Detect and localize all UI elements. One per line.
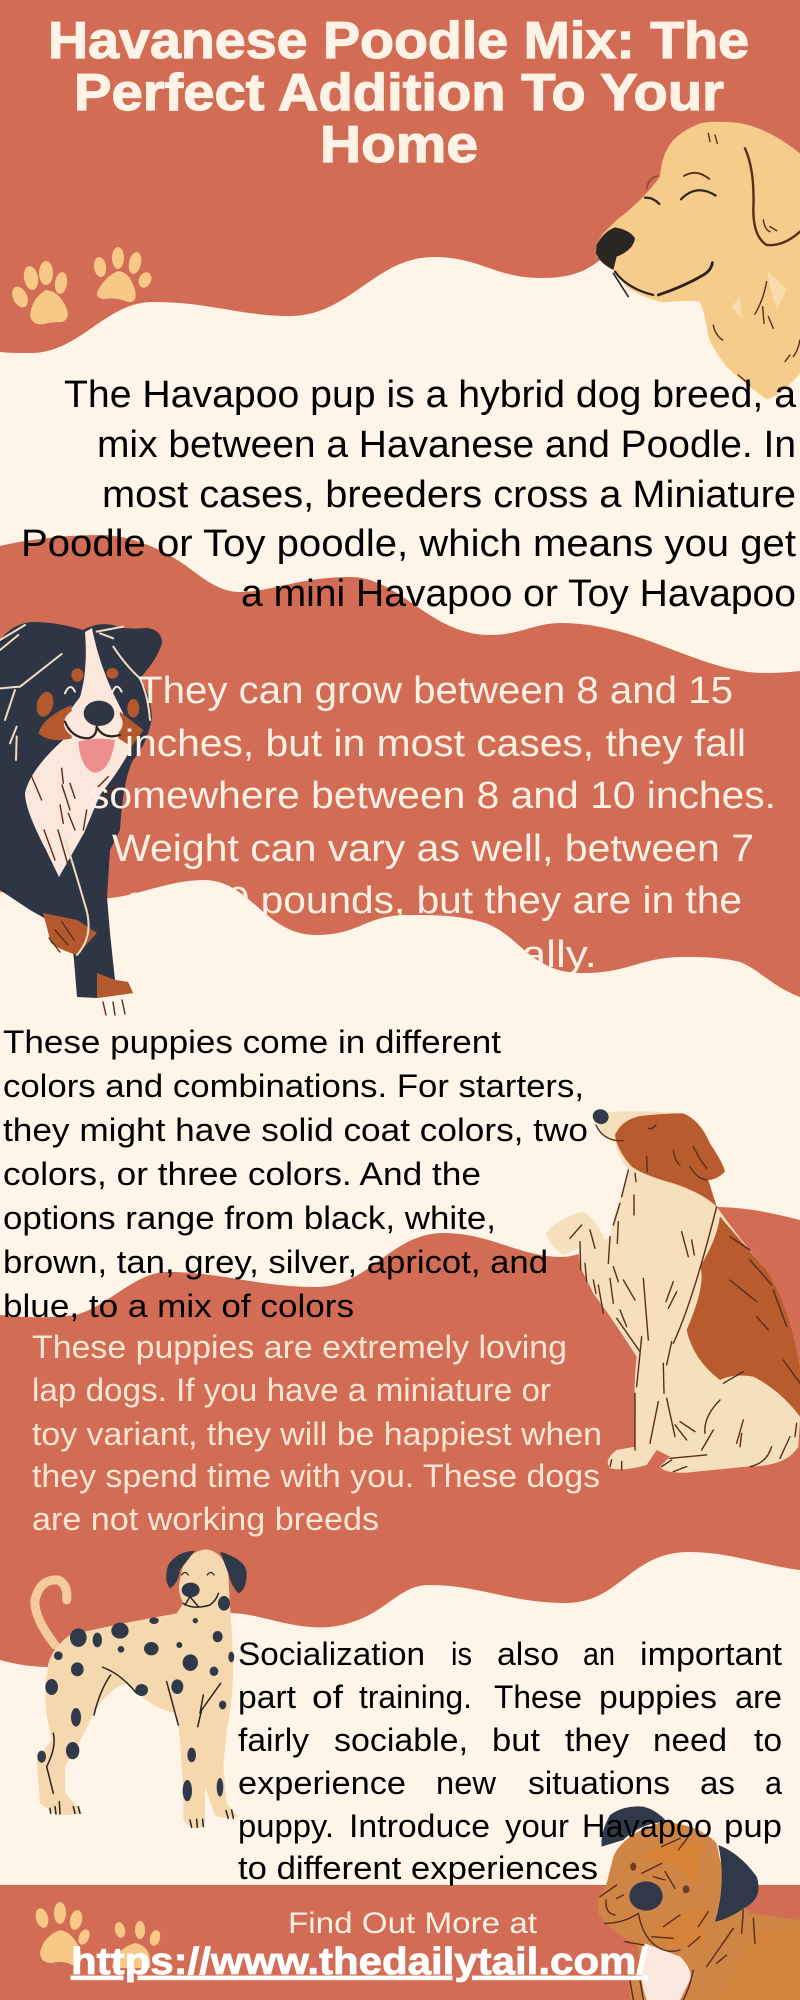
footer label: Find Out More at bbox=[288, 1907, 538, 1940]
text block: socialization: new bbox=[436, 1765, 497, 1801]
text block: coat colours: These puppies come in different bbox=[3, 1024, 501, 1060]
text block: coat colours: options range from black, white, bbox=[3, 1200, 496, 1236]
text block: socialization: important bbox=[640, 1636, 782, 1672]
text block: coat colours: colors and combinations. For starters, bbox=[3, 1068, 584, 1104]
illustration: bernese dog bbox=[0, 622, 162, 1015]
text block: socialization: fairly bbox=[238, 1722, 309, 1758]
text block: socialization: Socialization bbox=[238, 1636, 425, 1672]
text block: socialization: a bbox=[765, 1765, 782, 1801]
illustration: dalmatian dog bbox=[35, 1549, 247, 1828]
text block: socialization: is bbox=[451, 1636, 472, 1672]
icon: paw print left bbox=[9, 261, 68, 324]
third wave band bbox=[0, 1207, 800, 1667]
text block: lap dogs bbox=[32, 1329, 602, 1537]
text block: coat colours: blue, to a mix of colors bbox=[3, 1288, 354, 1324]
text block: socialization: experience bbox=[238, 1765, 406, 1801]
text block: socialization: Havapoo bbox=[582, 1808, 712, 1844]
text block: intro about the Havapoo: mix between a Havanese and Poodle. In bbox=[97, 424, 796, 466]
text block: size and weight: inches, but in most cases, they fall bbox=[125, 723, 746, 765]
text block: size and weight: and 20 pounds, but they are in the bbox=[125, 880, 742, 922]
text block: socialization: puppy. bbox=[238, 1808, 334, 1844]
text block: socialization: to different experiences bbox=[238, 1850, 598, 1886]
title: Perfect Addition To Your bbox=[74, 64, 724, 122]
text block: size and weight: usually. bbox=[450, 934, 597, 976]
text block: socialization: training. bbox=[359, 1679, 472, 1715]
text block: coat colours: brown, tan, grey, silver, apricot, and bbox=[3, 1244, 548, 1280]
text block: socialization: but bbox=[492, 1722, 540, 1758]
footer band bbox=[0, 1885, 800, 2000]
text block: socialization: your bbox=[505, 1808, 569, 1844]
title: Home bbox=[320, 116, 478, 174]
text block: socialization: as bbox=[700, 1765, 735, 1801]
text block: lap dogs: are not working breeds bbox=[32, 1501, 379, 1537]
text block: socialization: are bbox=[735, 1679, 782, 1715]
text block: lap dogs: lap dogs. If you have a miniature or bbox=[32, 1372, 551, 1408]
illustration: golden dog bbox=[596, 122, 800, 399]
text block: socialization: pup bbox=[724, 1808, 782, 1844]
title bbox=[48, 12, 749, 174]
top wave band bbox=[0, 0, 800, 353]
text block: intro about the Havapoo: The Havapoo pup is a hybrid dog breed, a bbox=[64, 374, 797, 416]
text block: lap dogs: toy variant, they will be happiest when bbox=[32, 1416, 602, 1452]
text block: socialization bbox=[238, 1636, 782, 1886]
footer link: https://www.thedailytail.com/ bbox=[71, 1941, 648, 1983]
text block: socialization: situations bbox=[528, 1765, 670, 1801]
text block: size and weight: somewhere between 8 and 10 inches. bbox=[89, 775, 776, 817]
text block: socialization: sociable, bbox=[334, 1722, 468, 1758]
illustration: brown and cream dog bbox=[546, 1107, 800, 1473]
icon: footer paw left bbox=[34, 1902, 92, 1965]
text block: intro about the Havapoo: a mini Havapoo or Toy Havapoo bbox=[241, 573, 796, 615]
text block: size and weight bbox=[89, 670, 776, 976]
title: Havanese Poodle Mix: The bbox=[48, 12, 749, 70]
text block: socialization: puppies bbox=[599, 1679, 717, 1715]
text block: lap dogs: they spend time with you. These dogs bbox=[32, 1458, 600, 1494]
text block: socialization: also bbox=[497, 1636, 559, 1672]
text block: coat colours bbox=[3, 1024, 588, 1324]
illustration: bulldog bbox=[598, 1806, 800, 2000]
icon: paw print right bbox=[93, 247, 154, 302]
text block: coat colours: colors, or three colors. And the bbox=[3, 1156, 481, 1192]
text block: intro about the Havapoo: Poodle or Toy poodle, which means you get bbox=[21, 523, 796, 565]
text block: size and weight: Weight can vary as well, between 7 bbox=[112, 828, 754, 870]
text block: intro about the Havapoo bbox=[21, 374, 797, 615]
text block: socialization: These bbox=[494, 1679, 582, 1715]
text block: socialization: of bbox=[312, 1679, 343, 1715]
icon: footer paw right bbox=[112, 1921, 162, 1968]
text block: socialization: need bbox=[653, 1722, 727, 1758]
text block: socialization: Introduce bbox=[349, 1808, 490, 1844]
text block: socialization: an bbox=[583, 1636, 615, 1672]
text block: socialization: part bbox=[238, 1679, 296, 1715]
text block: socialization: they bbox=[565, 1722, 629, 1758]
text block: intro about the Havapoo: most cases, breeders cross a Miniature bbox=[102, 474, 796, 516]
text block: socialization: to bbox=[754, 1722, 782, 1758]
text block: lap dogs: These puppies are extremely loving bbox=[32, 1329, 567, 1365]
second wave band bbox=[0, 535, 800, 997]
text block: coat colours: they might have solid coat colors, two bbox=[3, 1112, 588, 1148]
text block: size and weight: They can grow between 8 and 15 bbox=[138, 670, 733, 712]
